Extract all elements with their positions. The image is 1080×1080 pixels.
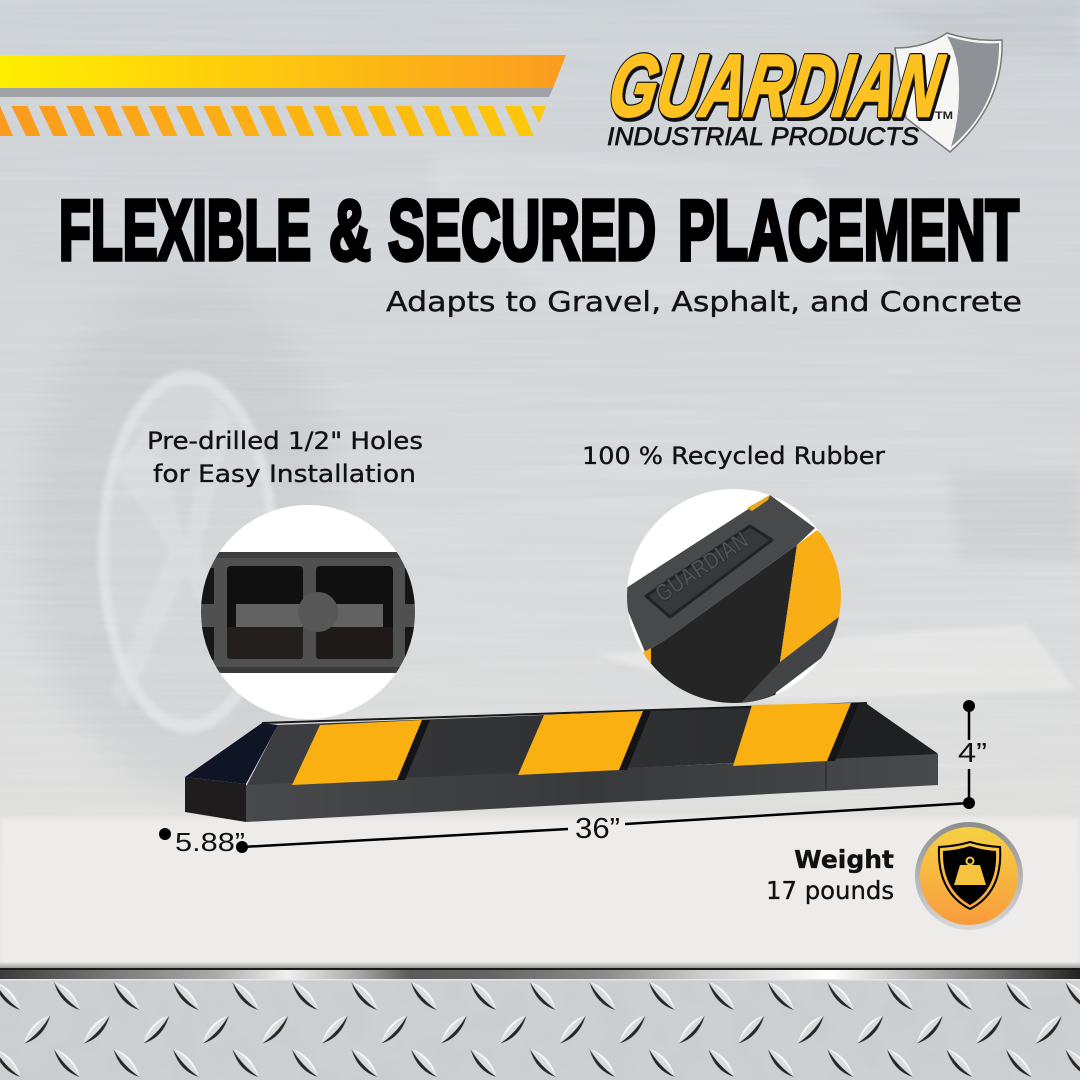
dimension: 4 inch height (958, 700, 987, 809)
weight text (766, 845, 894, 905)
dimension: 36 inch length: 36” (575, 813, 620, 845)
title: & (329, 184, 371, 278)
icon: weight badge (915, 822, 1023, 930)
reflective stripe 3 (733, 703, 859, 766)
logo: Guardian Industrial Products: GUARDIAN (603, 36, 950, 135)
callout: rubber close-up photo: GUARDIAN (650, 527, 754, 608)
label: pre-drilled holes: for Easy Installation (153, 460, 416, 488)
header stripe: yellow bar (0, 55, 566, 136)
wheel stop product (185, 703, 938, 822)
callout: rubber close-up photo (627, 489, 841, 703)
reflective stripe 2 (518, 711, 651, 775)
footer: diamond plate (0, 962, 1080, 1080)
dimension: 36 inch length (236, 803, 969, 853)
subtitle: Adapts to Gravel, Asphalt, and Concrete (386, 285, 1022, 318)
title: SECURED (388, 184, 656, 278)
logo: Guardian Industrial Products: GUARDIAN (603, 36, 950, 135)
title (59, 184, 1019, 278)
weight text: 17 pounds (766, 876, 894, 905)
label: recycled rubber: 100 % Recycled Rubber (582, 442, 885, 470)
dimension: 4 inch height: 4” (958, 737, 987, 768)
label: pre-drilled holes (147, 427, 423, 488)
dimension: 5.88 inch width: 5.88” (175, 827, 245, 857)
logo: Guardian Industrial Products: TM (935, 110, 953, 122)
dimension: 5.88 inch width (159, 827, 245, 857)
reflective stripe 1 (292, 720, 430, 785)
logo: Guardian Industrial Products: INDUSTRIAL PRODUCTS (607, 123, 919, 151)
callout: underside holes photo (201, 505, 415, 719)
logo: Guardian Industrial Products: GUARDIAN (605, 38, 952, 137)
label: pre-drilled holes: Pre-drilled 1/2" Holes (147, 427, 423, 455)
title: FLEXIBLE (59, 184, 311, 278)
weight text: Weight (794, 845, 894, 874)
